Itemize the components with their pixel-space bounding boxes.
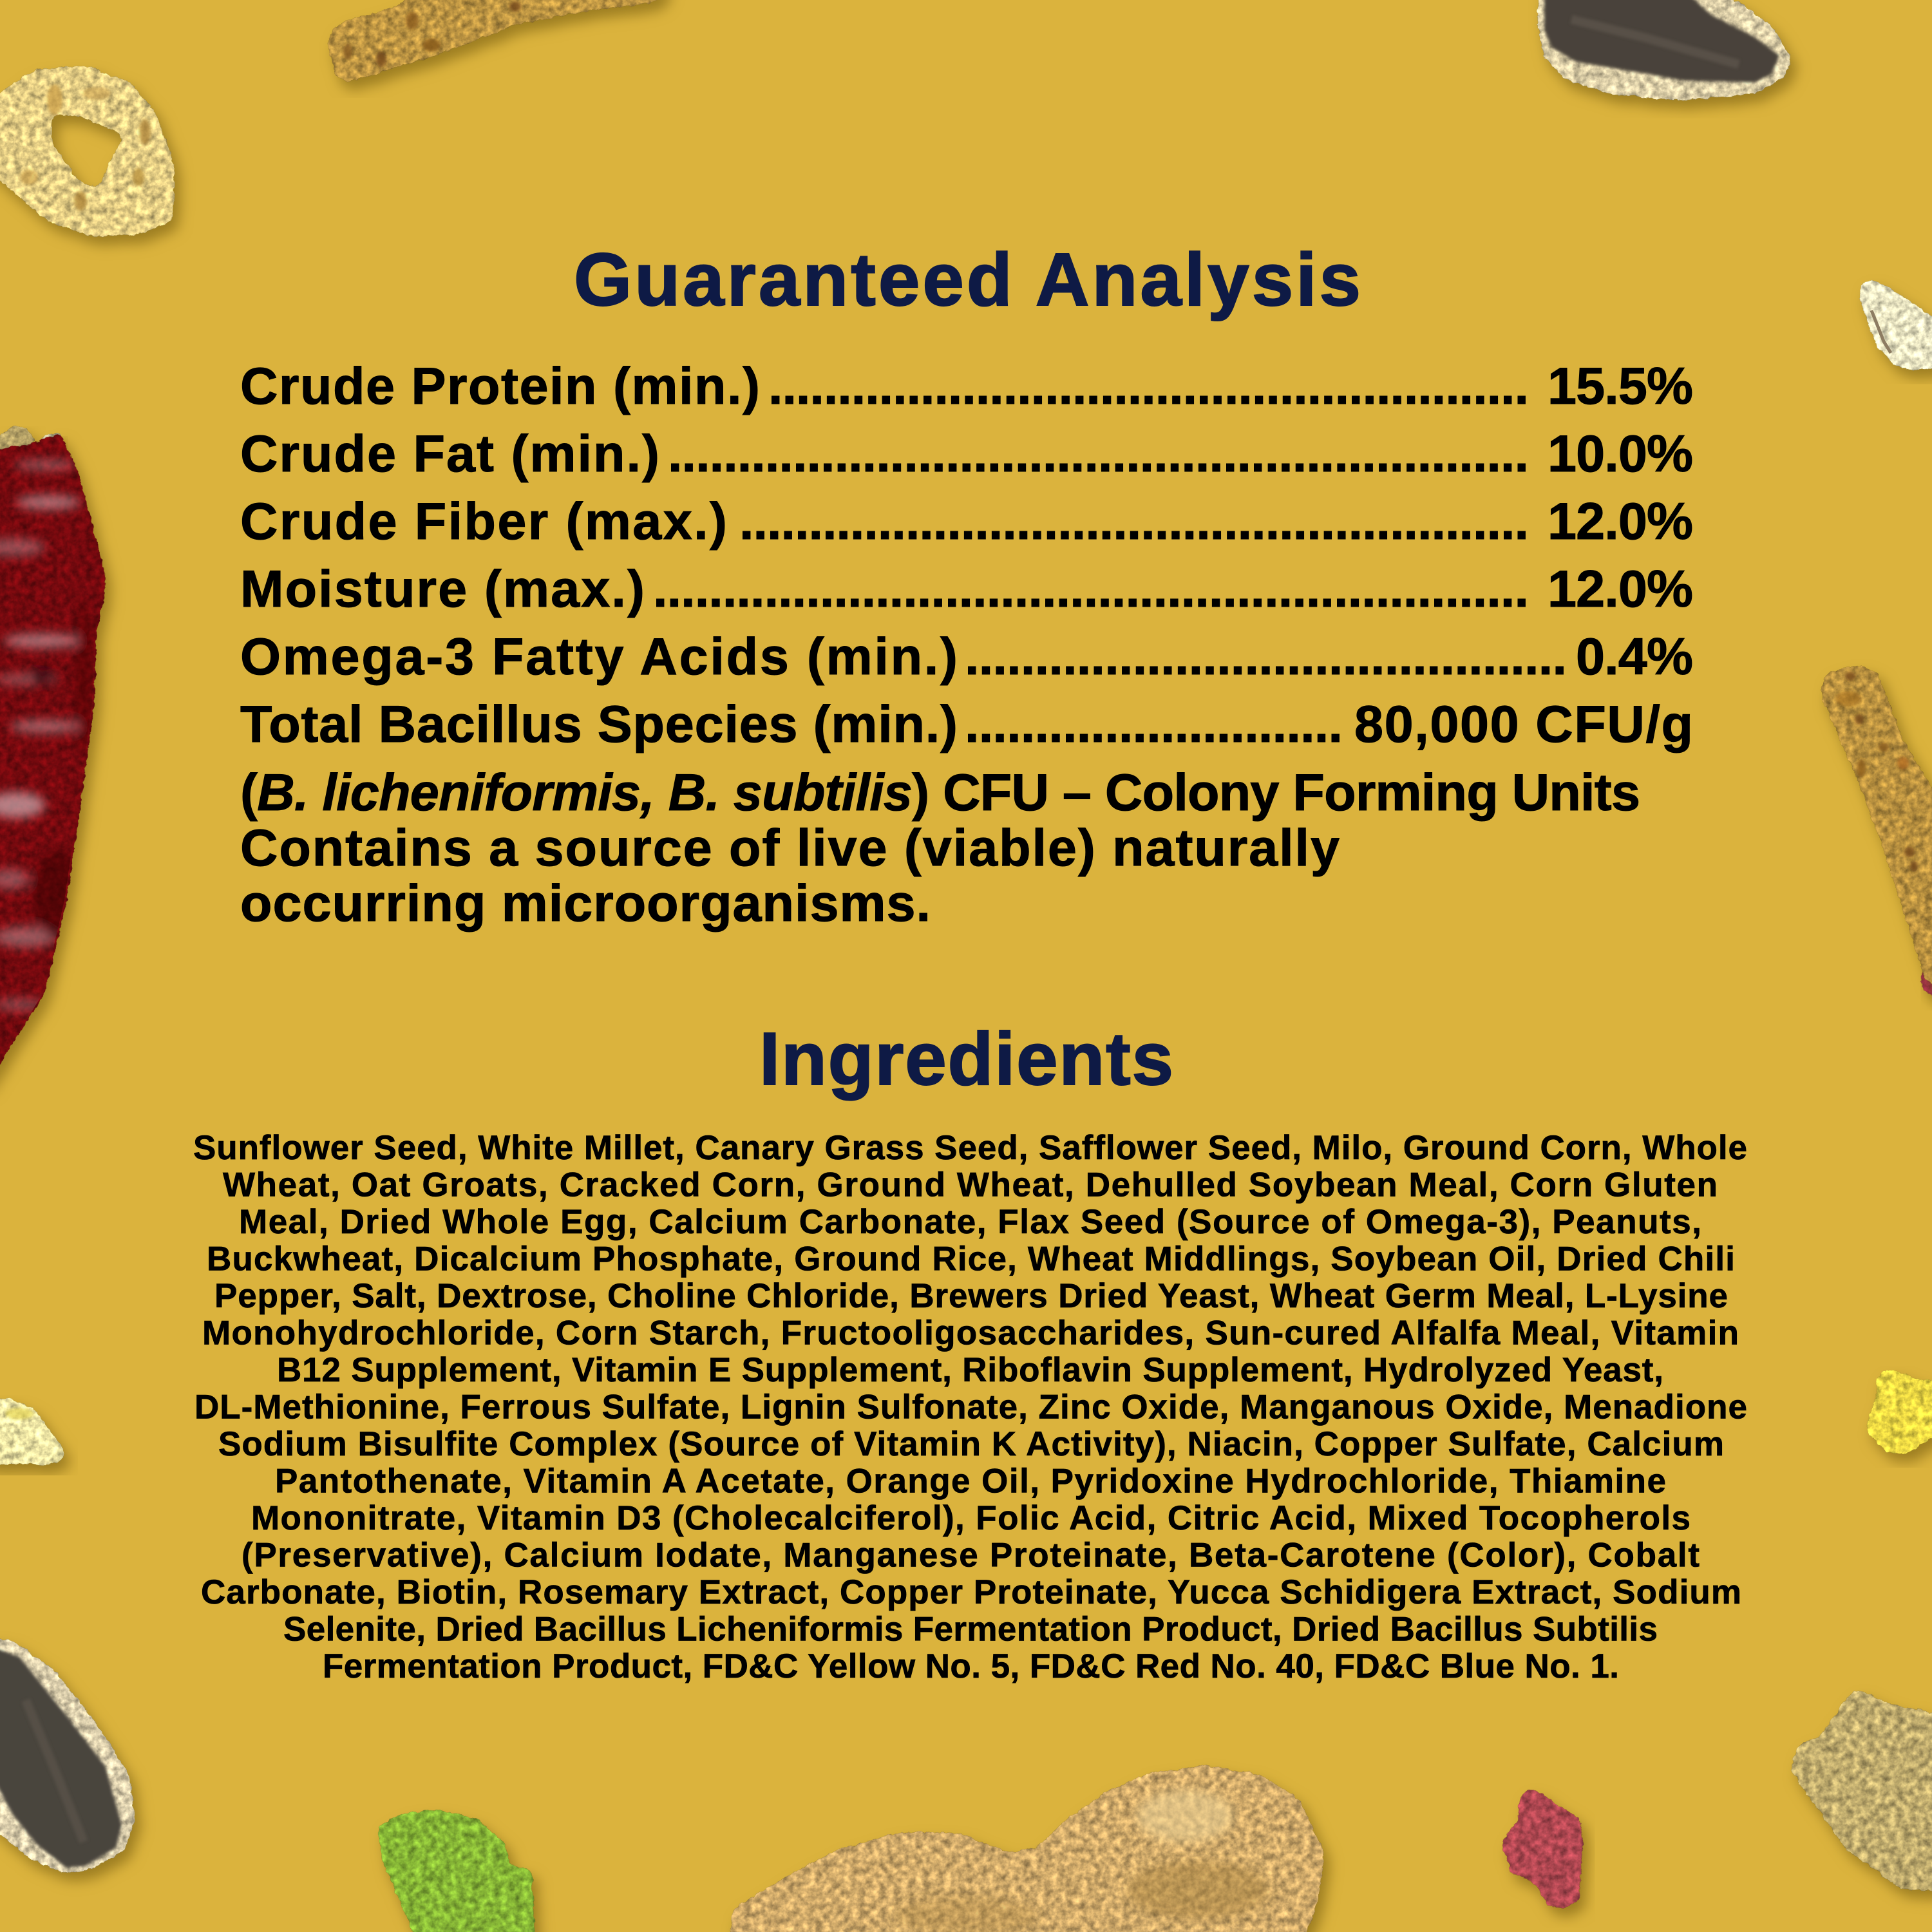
row: crude fat xyxy=(240,425,1693,483)
image: peanut, bottom xyxy=(727,1765,1325,1932)
ingredients list: DL-Methionine, Ferrous Sulfate, Lignin Sulfonate, Zinc Oxide, Manganous Oxide, Menadione xyxy=(194,1388,1747,1426)
image: red pellet, bottom xyxy=(1501,1788,1582,1909)
ingredients list: Pepper, Salt, Dextrose, Choline Chloride, Brewers Dried Yeast, Wheat Germ Meal, L-Lysine xyxy=(214,1277,1728,1315)
ingredients list: Carbonate, Biotin, Rosemary Extract, Copper Proteinate, Yucca Schidigera Extract, Sodium xyxy=(201,1573,1741,1611)
row: omega-3 xyxy=(240,628,1693,686)
ingredients list: Meal, Dried Whole Egg, Calcium Carbonate, Flax Seed (Source of Omega-3), Peanuts, xyxy=(239,1203,1701,1241)
ingredients list: Monohydrochloride, Corn Starch, Fructooligosaccharides, Sun-cured Alfalfa Meal, Vitamin xyxy=(202,1314,1739,1352)
note: live microorganisms line 1: Contains a source of live (viable) naturally xyxy=(240,819,1340,877)
row: total bacillus: 80,000 CFU/g xyxy=(1354,696,1693,753)
row: crude fiber: Crude Fiber (max.) xyxy=(240,493,727,551)
ingredients list: Mononitrate, Vitamin D3 (Cholecalciferol), Folic Acid, Citric Acid, Mixed Tocopherols xyxy=(251,1499,1690,1537)
row: omega-3: 0.4% xyxy=(1576,628,1693,686)
image: corn piece, left xyxy=(0,1397,65,1465)
row: crude fiber xyxy=(240,493,1693,551)
guaranteed analysis table xyxy=(240,357,1693,933)
ingredients list: B12 Supplement, Vitamin E Supplement, Riboflavin Supplement, Hydrolyzed Yeast, xyxy=(277,1351,1663,1389)
row: crude fiber: ......................................................... xyxy=(739,493,1529,551)
heading: Ingredients: Ingredients xyxy=(759,1017,1173,1101)
row: omega-3: Omega-3 Fatty Acids (min.) xyxy=(240,628,958,686)
ingredients list: Fermentation Product, FD&C Yellow No. 5, FD&C Red No. 40, FD&C Blue No. 1. xyxy=(323,1647,1619,1685)
ingredients list: Pantothenate, Vitamin A Acetate, Orange Oil, Pyridoxine Hydrochloride, Thiamine xyxy=(275,1462,1666,1501)
ingredients list: Wheat, Oat Groats, Cracked Corn, Ground Wheat, Dehulled Soybean Meal, Corn Gluten xyxy=(223,1166,1718,1204)
image: sunflower seed, top right xyxy=(1537,0,1792,100)
note: bacillus strains: (B. licheniformis, B. subtilis) CFU – Colony Forming Units xyxy=(240,764,1640,822)
ingredients list: Buckwheat, Dicalcium Phosphate, Ground Rice, Wheat Middlings, Soybean Oil, Dried Chili xyxy=(207,1240,1735,1278)
ingredients list: Selenite, Dried Bacillus Licheniformis Fermentation Product, Dried Bacillus Subtilis xyxy=(283,1610,1658,1649)
row: moisture: 12.0% xyxy=(1548,560,1693,618)
image: corn piece, right xyxy=(1865,1370,1932,1455)
row: total bacillus: ........................... xyxy=(965,696,1343,753)
row: crude fat: .............................................................. xyxy=(668,425,1529,483)
row: moisture: Moisture (max.) xyxy=(240,560,645,618)
heading: Guaranteed Analysis: Guaranteed Analysis xyxy=(574,238,1361,321)
row: moisture: ............................................................... xyxy=(653,560,1529,618)
ingredients list xyxy=(193,1129,1747,1685)
row: total bacillus xyxy=(240,696,1693,753)
ingredients list: Sunflower Seed, White Millet, Canary Grass Seed, Safflower Seed, Milo, Ground Corn, Whole xyxy=(193,1129,1747,1167)
row: moisture xyxy=(240,560,1693,618)
row: crude protein: 15.5% xyxy=(1548,357,1693,415)
image: green leaf piece, bottom xyxy=(377,1809,535,1932)
row: crude fat: 10.0% xyxy=(1548,425,1693,483)
row: total bacillus: Total Bacillus Species (min.) xyxy=(240,696,958,753)
row: crude protein xyxy=(240,357,1693,415)
image: sunflower seed, bottom left xyxy=(0,1636,135,1873)
row: crude fiber: 12.0% xyxy=(1548,493,1693,551)
image: cereal ring, top left xyxy=(0,66,175,236)
row: omega-3: ........................................... xyxy=(965,628,1567,686)
image: extruded stick, top xyxy=(327,0,670,82)
image: seed kernel, right xyxy=(1859,279,1932,370)
row: crude fat: Crude Fat (min.) xyxy=(240,425,659,483)
row: crude protein: Crude Protein (min.) xyxy=(240,357,760,415)
row: crude protein: ....................................................... xyxy=(768,357,1529,415)
ingredients list: Sodium Bisulfite Complex (Source of Vitamin K Activity), Niacin, Copper Sulfate, Calcium xyxy=(218,1425,1724,1463)
ingredients list: (Preservative), Calcium Iodate, Manganese Proteinate, Beta-Carotene (Color), Cobalt xyxy=(242,1537,1700,1574)
image: dried chili pepper, left xyxy=(0,424,107,1095)
image: extruded stick, right xyxy=(1820,665,1932,1005)
note: live microorganisms line 2: occurring microorganisms. xyxy=(240,875,931,933)
image: biscuit piece, bottom right xyxy=(1790,1688,1932,1891)
